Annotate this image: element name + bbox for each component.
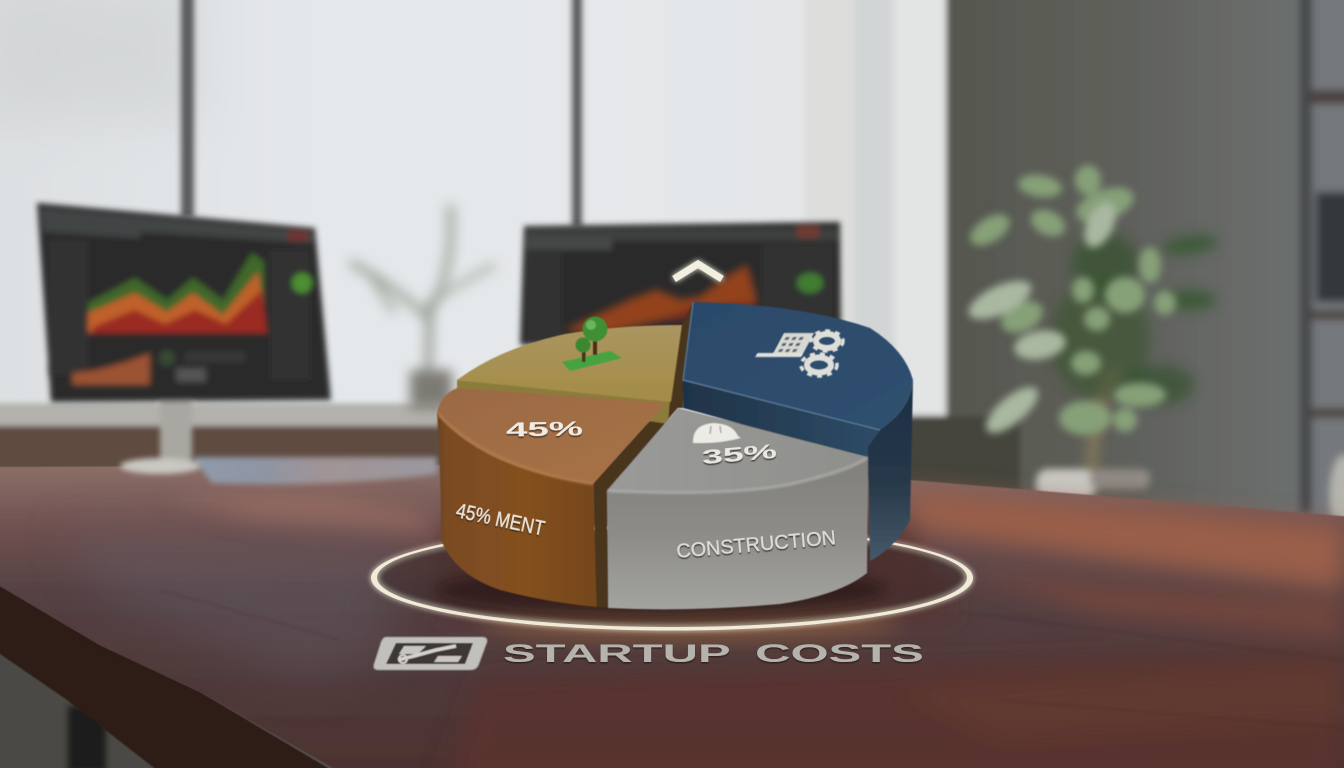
window frame and pillar	[804, 0, 948, 420]
icon: building	[755, 333, 814, 357]
icon: gear upper	[811, 331, 843, 351]
title: startup costs	[374, 637, 924, 670]
right monitor area chart	[565, 265, 757, 335]
base glow	[480, 606, 900, 638]
wood streaks	[160, 590, 1344, 728]
shelf	[1300, 0, 1344, 535]
slice: gray construction	[607, 408, 868, 609]
percent label top: 45%	[506, 418, 584, 442]
plant pot	[1036, 469, 1150, 499]
icon: trees on green base	[562, 316, 622, 371]
3D pie chart	[435, 302, 913, 615]
left monitor	[37, 203, 331, 466]
back desk	[0, 403, 440, 470]
wooden table	[0, 465, 1344, 768]
top rim highlight	[608, 458, 867, 493]
monitor base and keyboard on table	[120, 457, 437, 484]
table top	[0, 465, 1344, 768]
left table sheen	[102, 546, 387, 675]
icon: gear lower	[801, 354, 837, 376]
slice: brown management	[437, 388, 666, 607]
plant leaves	[963, 165, 1176, 499]
top rim highlight	[438, 414, 593, 484]
table leg	[68, 706, 106, 768]
right monitor	[520, 222, 841, 345]
slice: navy blue	[683, 302, 913, 561]
pie contact shadow	[435, 565, 885, 615]
large background plant	[1050, 232, 1219, 480]
window	[0, 0, 810, 420]
left monitor small chart	[72, 350, 245, 385]
chevron arrow	[674, 264, 722, 279]
left monitor sidebar	[48, 240, 88, 375]
glowing base ring	[371, 525, 973, 631]
percent label: 35%	[701, 441, 778, 469]
table reflections	[165, 490, 1344, 768]
slice: olive land	[457, 316, 682, 424]
back wall	[947, 0, 1344, 530]
slice gaps	[593, 302, 693, 608]
icon: tools badge	[374, 637, 487, 670]
side label: CONSTRUCTION	[676, 527, 837, 563]
side label: 45% MENT	[454, 499, 547, 541]
title text: STARTUP COSTS	[503, 640, 924, 668]
left monitor area chart	[88, 253, 312, 333]
window mullions	[180, 0, 583, 228]
icon: hard hat	[693, 423, 741, 443]
table side edge	[0, 580, 345, 768]
small background plant	[350, 205, 495, 408]
under table	[0, 640, 167, 768]
blurred office background	[0, 0, 1344, 535]
